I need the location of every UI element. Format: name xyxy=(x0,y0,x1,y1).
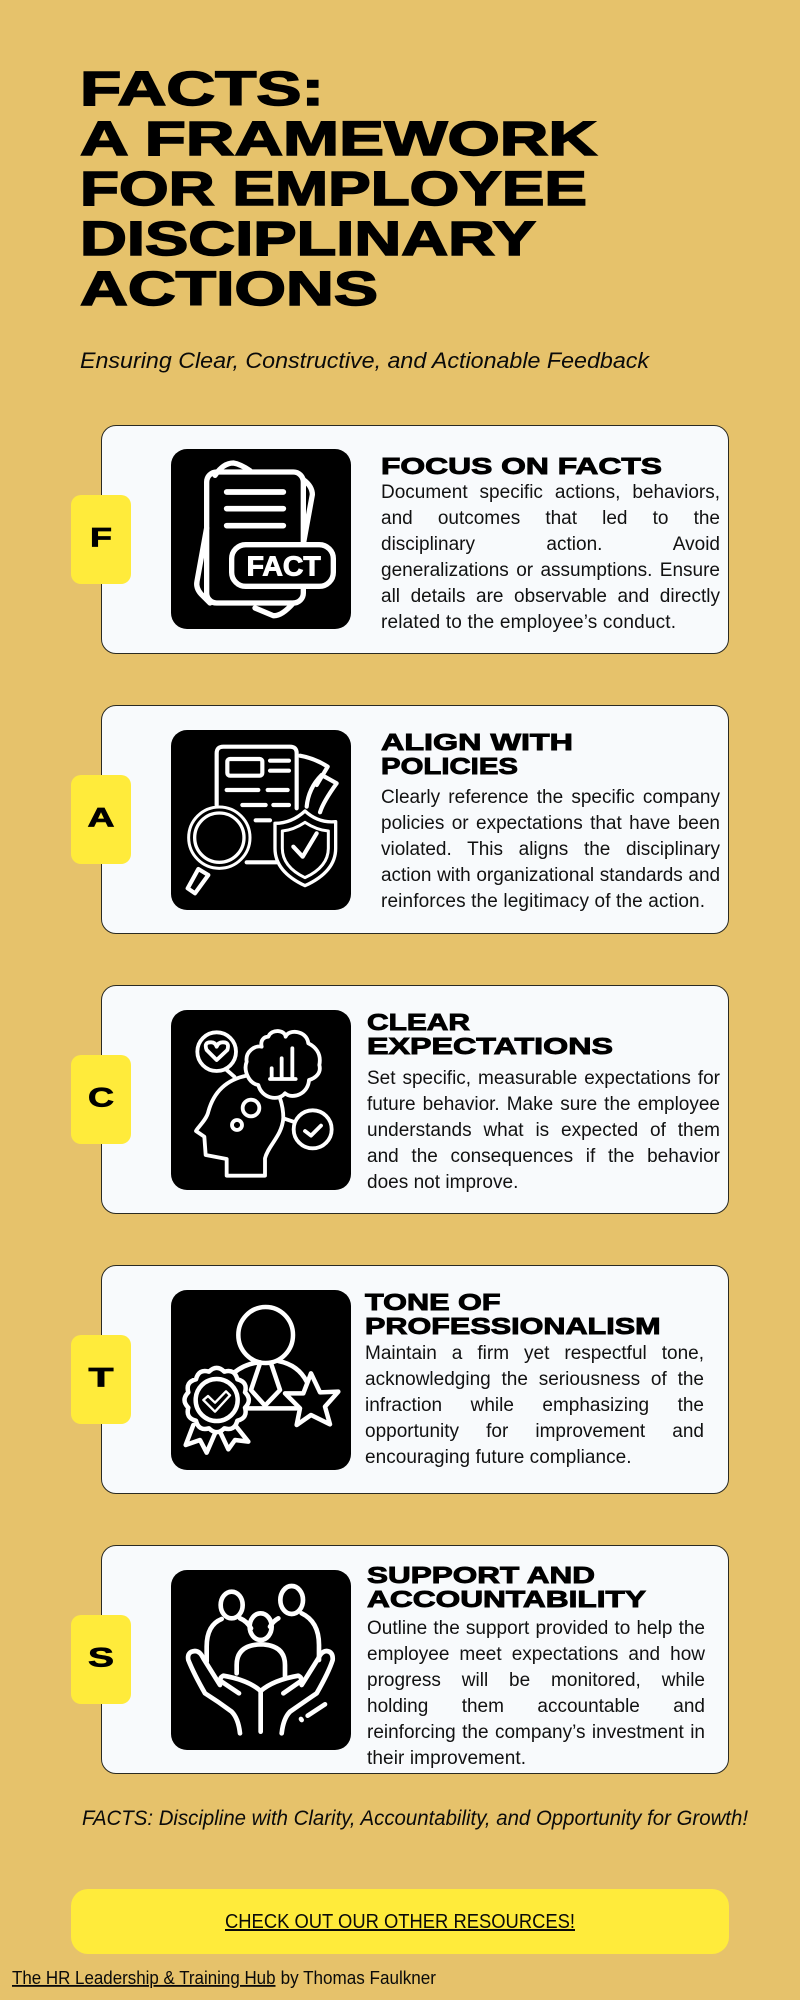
badge: letter F xyxy=(71,495,131,584)
text block: violated. This aligns the disciplinary xyxy=(381,838,720,860)
badge: letter C: C xyxy=(88,1082,114,1112)
text block: acknowledging the seriousness of the xyxy=(365,1368,704,1390)
call to action button xyxy=(71,1889,729,1954)
footer credit xyxy=(12,1968,436,1988)
text block: action with organizational standards and xyxy=(381,864,720,886)
card background xyxy=(101,425,729,654)
icon: fact document xyxy=(171,449,351,629)
text block: Outline the support provided to help the xyxy=(367,1618,705,1638)
badge: letter C xyxy=(71,1055,131,1144)
text block: related to the employee’s conduct. xyxy=(381,612,676,632)
title xyxy=(80,62,598,316)
badge: letter A xyxy=(71,775,131,864)
title: FACTS: xyxy=(80,62,324,116)
text block: and the consequences if the behavior xyxy=(367,1146,720,1166)
heading: SUPPORT AND xyxy=(367,1562,595,1588)
text block: future behavior. Make sure the employee xyxy=(367,1094,720,1114)
text block: Clearly reference the specific company xyxy=(381,786,720,808)
text block: Set specific, measurable expectations for xyxy=(367,1068,720,1088)
icon: policy document, magnifier and shield xyxy=(171,730,351,910)
panel: A - align with policies xyxy=(71,705,729,934)
text block xyxy=(365,1342,704,1468)
text block: generalizations or assumptions. Ensure xyxy=(381,560,720,580)
badge: letter S: S xyxy=(88,1642,114,1672)
heading: ALIGN WITH xyxy=(381,729,573,755)
heading xyxy=(364,1289,661,1339)
heading xyxy=(367,1009,613,1059)
text block: progress will be monitored, while xyxy=(367,1670,705,1690)
footer credit: The HR Leadership & Training Hub xyxy=(12,1968,276,1988)
text block: holding them accountable and xyxy=(367,1696,705,1716)
text block: and outcomes that led to the xyxy=(381,508,720,528)
panel: S - support and accountability xyxy=(71,1545,729,1774)
panel: T - tone of professionalism xyxy=(71,1265,729,1494)
heading: EXPECTATIONS xyxy=(367,1033,613,1059)
badge: letter F: F xyxy=(90,522,112,552)
text block xyxy=(367,1618,705,1768)
closing tagline: FACTS: Discipline with Clarity, Accountability, and Opportunity for Growth! xyxy=(82,1807,748,1830)
card background xyxy=(101,1265,729,1494)
heading xyxy=(367,1562,647,1612)
panel: C - clear expectations xyxy=(71,985,729,1214)
text block: does not improve. xyxy=(367,1172,518,1192)
text block: policies or expectations that have been xyxy=(381,812,720,834)
title: ACTIONS xyxy=(80,262,378,316)
text block: encouraging future compliance. xyxy=(365,1446,632,1468)
heading: ACCOUNTABILITY xyxy=(367,1586,647,1612)
text block: disciplinary action. Avoid xyxy=(381,534,720,554)
footer credit: by Thomas Faulkner xyxy=(281,1968,436,1988)
icon: head with thoughts xyxy=(171,1010,351,1190)
text block: their improvement. xyxy=(367,1748,526,1768)
text block: opportunity for improvement and xyxy=(365,1420,704,1442)
text block: understands what is expected of them xyxy=(367,1120,720,1140)
text block: reinforces the legitimacy of the action. xyxy=(381,890,705,912)
badge: letter T xyxy=(71,1335,131,1424)
title: FOR EMPLOYEE xyxy=(80,162,587,216)
badge: letter S xyxy=(71,1615,131,1704)
text block xyxy=(367,1068,720,1192)
heading: POLICIES xyxy=(381,753,518,779)
subtitle: Ensuring Clear, Constructive, and Actionable Feedback xyxy=(80,348,651,373)
heading xyxy=(381,729,573,779)
text block: Maintain a firm yet respectful tone, xyxy=(365,1342,704,1364)
icon: fact document: FACT xyxy=(247,551,321,582)
title: DISCIPLINARY xyxy=(80,212,536,266)
heading: CLEAR xyxy=(367,1009,470,1035)
heading: FOCUS ON FACTS xyxy=(381,453,662,479)
text block: infraction while emphasizing the xyxy=(365,1394,704,1416)
text block xyxy=(381,786,720,912)
heading: TONE OF xyxy=(365,1289,501,1315)
badge: letter T: T xyxy=(88,1362,114,1392)
title: A FRAMEWORK xyxy=(80,112,597,166)
heading: PROFESSIONALISM xyxy=(365,1313,661,1339)
text block: Document specific actions, behaviors, xyxy=(381,482,720,502)
text block xyxy=(381,482,720,632)
text block: employee meet expectations and how xyxy=(367,1644,705,1664)
icon: professional with rosette and star xyxy=(171,1290,351,1470)
card background xyxy=(101,1545,729,1774)
text block: all details are observable and directly xyxy=(381,586,720,606)
text block: reinforcing the company’s investment in xyxy=(367,1722,705,1742)
card background xyxy=(101,985,729,1214)
icon: hands holding people xyxy=(171,1570,351,1750)
call to action button: CHECK OUT OUR OTHER RESOURCES! xyxy=(225,1911,575,1933)
card background xyxy=(101,705,729,934)
badge: letter A: A xyxy=(88,802,114,832)
panel: F - focus on facts xyxy=(71,425,729,654)
